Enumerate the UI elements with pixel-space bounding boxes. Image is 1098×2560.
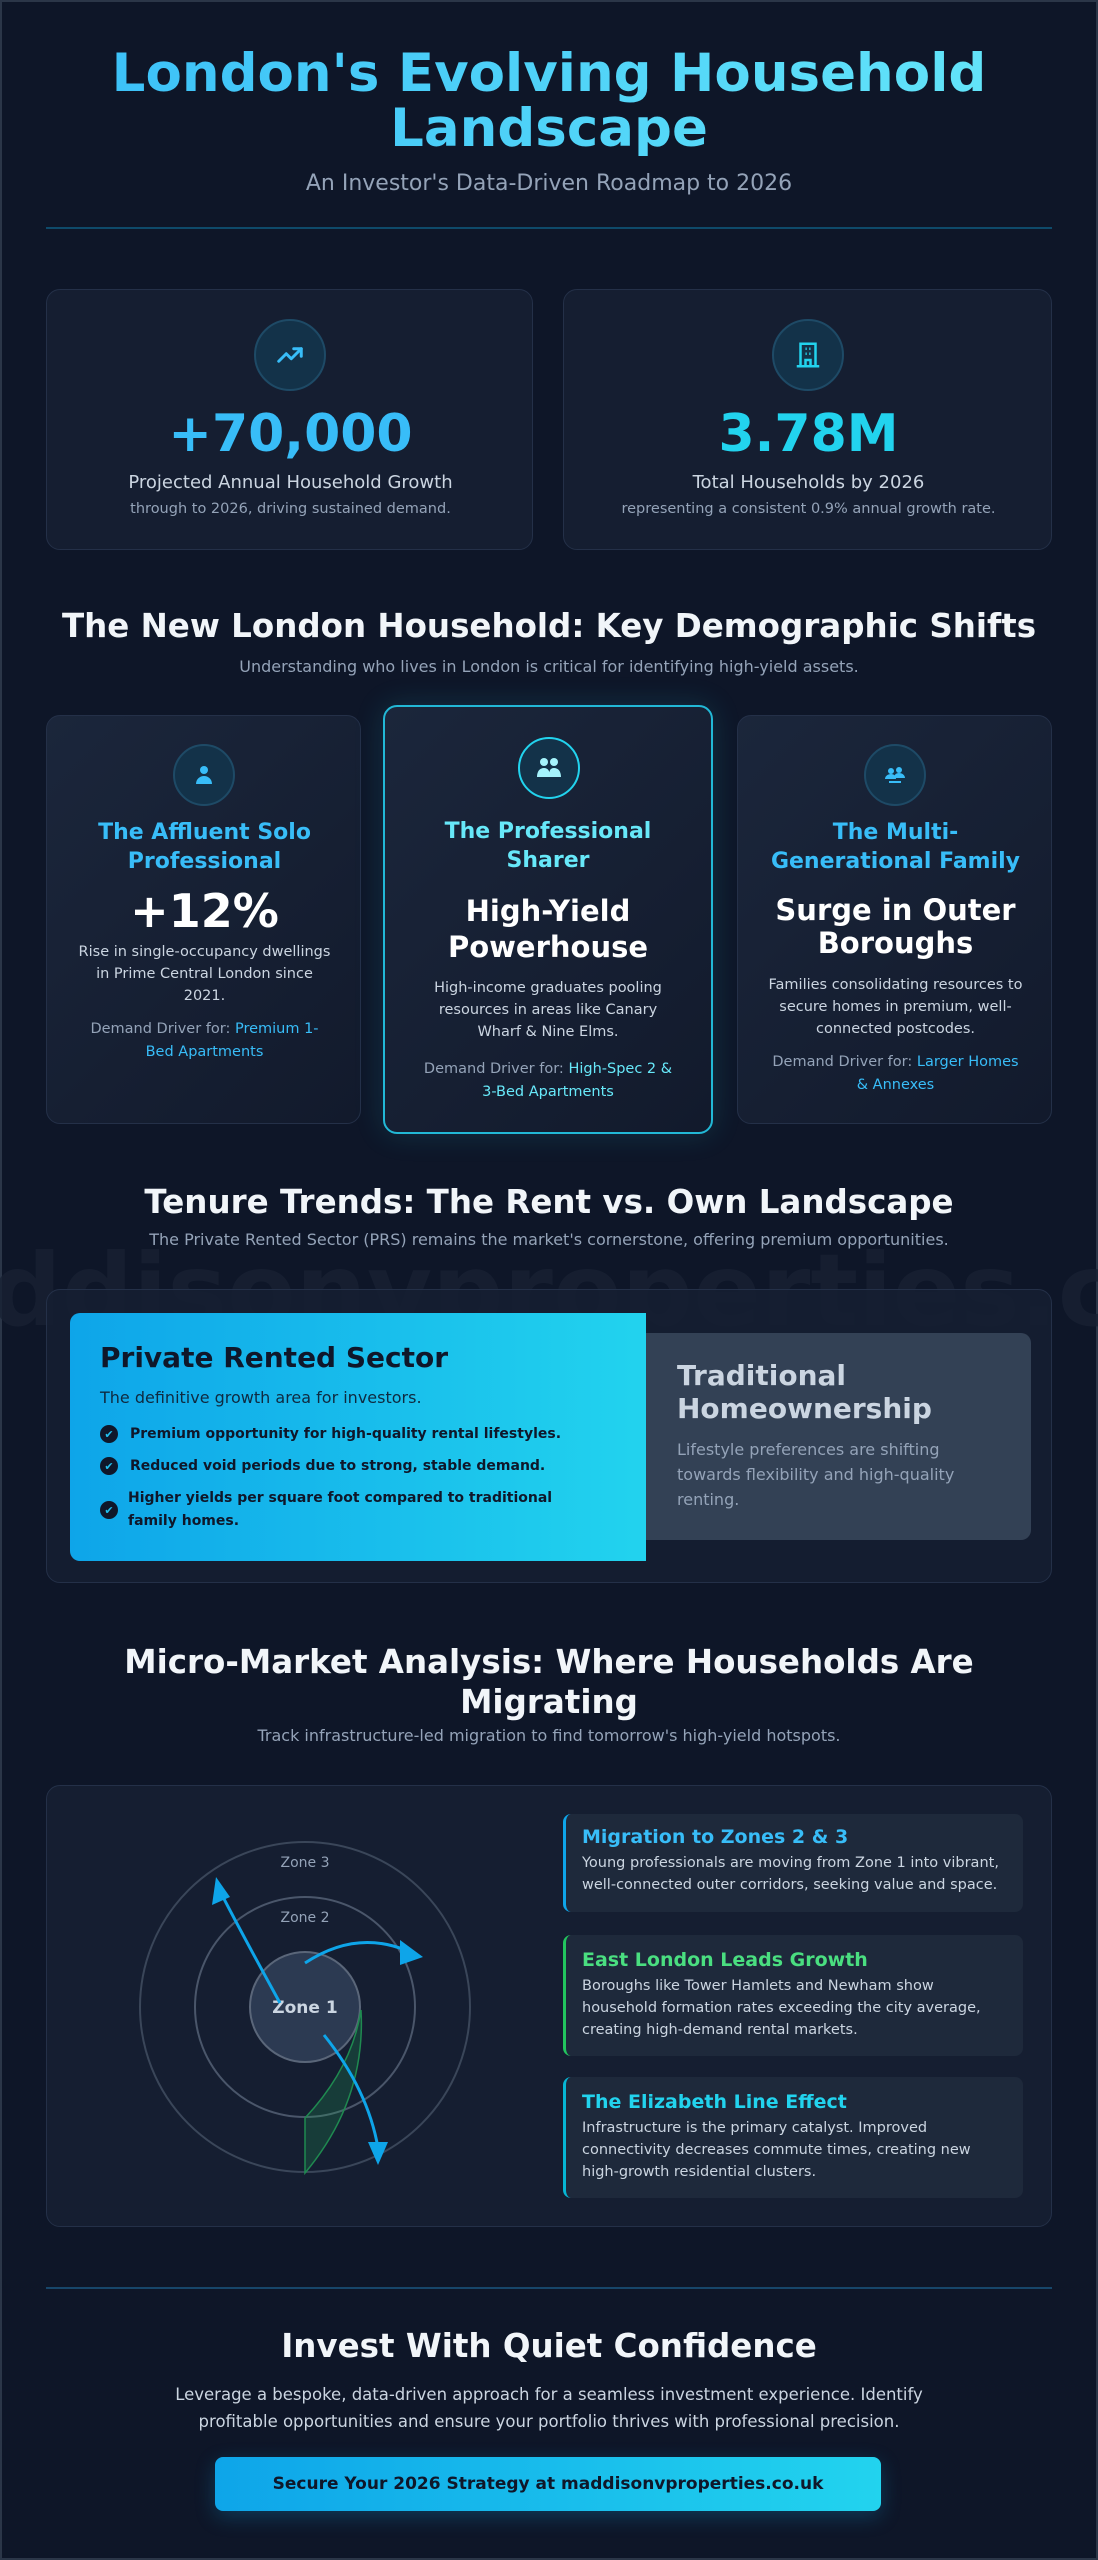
text: The Private Rented Sector (PRS) remains the market's cornerstone, offering premium opportunities. — [149, 1230, 949, 1249]
traditional homeownership: Homeownership — [677, 1392, 932, 1425]
heading: micro-market: Migrating — [460, 1683, 638, 1721]
panel: affluent solo — [46, 715, 361, 1124]
subtitle: An Investor's Data-Driven Roadmap to 2026 — [306, 171, 792, 196]
private rented sector: Private Rented Sector — [100, 1341, 448, 1374]
title: Landscape — [390, 98, 708, 159]
callout: elizabeth line: Infrastructure is the primary catalyst. Improved connectivity decreases commute times, creating new high-growth residential clusters. — [582, 2120, 971, 2180]
panel: professional sharer: High-Yield — [466, 894, 630, 928]
callout: east london — [563, 1935, 1023, 2056]
chart: zone map: Zone 3 — [280, 1855, 330, 1871]
callout: migration: Young professionals are moving from Zone 1 into vibrant, well-connected outer corridors, seeking value and space. — [582, 1855, 999, 1893]
private rented sector: Premium opportunity for high-quality rental lifestyles. — [130, 1426, 561, 1442]
private rented sector: Reduced void periods due to strong, stable demand. — [130, 1458, 545, 1474]
title — [0, 46, 1098, 156]
panel: professional sharer: Powerhouse — [448, 930, 648, 964]
traditional homeownership: Traditional — [677, 1359, 846, 1392]
stat card: household growth: Projected Annual Household Growth — [128, 472, 453, 493]
panel: multi-generational: Surge in Outer — [775, 893, 1016, 927]
panel: affluent solo: Rise in single-occupancy dwellings in Prime Central London since 2021. — [79, 944, 330, 1004]
panel: multi-generational: Generational Family — [771, 849, 1020, 874]
private rented sector: family homes. — [128, 1513, 239, 1529]
heading: micro-market — [124, 1643, 974, 1721]
chart: zone map: Zone 2 — [280, 1910, 330, 1926]
heading: invest: Invest With Quiet Confidence — [281, 2327, 817, 2365]
icon: building — [772, 319, 844, 391]
panel: affluent solo: Demand Driver for: Premium 1-Bed Apartments — [90, 1021, 319, 1060]
stat card: total households: representing a consistent 0.9% annual growth rate. — [621, 501, 996, 517]
heading: demographic shifts: The New London Household: Key Demographic Shifts — [62, 607, 1036, 645]
traditional homeownership — [627, 1333, 1031, 1540]
panel: professional sharer: The Professional — [445, 819, 651, 844]
stat card: household growth — [46, 289, 533, 550]
panel: affluent solo: The Affluent Solo — [98, 820, 311, 845]
button: CTA: Secure Your 2026 Strategy at maddisonvproperties.co.uk — [273, 2474, 823, 2494]
private rented sector: ✔ — [104, 1504, 114, 1516]
callout: migration: Migration to Zones 2 & 3 — [582, 1826, 848, 1848]
callout: east london: Boroughs like Tower Hamlets and Newham show household formation rates exceeding the city average, creating high-demand rental markets. — [582, 1978, 981, 2038]
number: 3.78M — [718, 404, 899, 464]
stat card: total households: Total Households by 2026 — [693, 472, 924, 493]
panel: affluent solo: +12% — [130, 884, 279, 938]
private rented sector — [70, 1313, 646, 1561]
stat card: household growth: through to 2026, driving sustained demand. — [130, 501, 451, 517]
private rented sector: ✔ — [104, 1460, 114, 1472]
panel: professional sharer: Sharer — [506, 848, 589, 873]
callout: migration — [563, 1814, 1023, 1912]
text: Track infrastructure-led migration to find tomorrow's high-yield hotspots. — [257, 1726, 841, 1745]
callout: elizabeth line — [563, 2077, 1023, 2198]
traditional homeownership: Lifestyle preferences are shifting towards flexibility and high-quality renting. — [677, 1440, 954, 1509]
button: CTA — [215, 2457, 881, 2511]
text: Understanding who lives in London is critical for identifying high-yield assets. — [239, 657, 859, 676]
title: London's Evolving Household — [112, 43, 986, 104]
panel: multi-generational: Boroughs — [818, 926, 973, 960]
panel: affluent solo: Professional — [128, 849, 281, 874]
callout: elizabeth line: The Elizabeth Line Effect — [582, 2091, 847, 2113]
stat card: total households — [563, 289, 1052, 550]
panel: multi-generational: Families consolidating resources to secure homes in premium, well-connected postcodes. — [769, 977, 1022, 1037]
icon: trend — [254, 319, 326, 391]
panel: multi-generational: The Multi- — [833, 820, 958, 845]
panel: professional sharer — [383, 705, 713, 1134]
panel: micro-market — [46, 1785, 1052, 2227]
panel: multi-generational — [737, 715, 1052, 1124]
panel: multi-generational: Demand Driver for: Larger Homes & Annexes — [772, 1054, 1019, 1093]
heading: tenure: Tenure Trends: The Rent vs. Own Landscape — [144, 1183, 954, 1221]
private rented sector: The definitive growth area for investors. — [100, 1388, 422, 1407]
chart: zone map: Zone 1 — [272, 1998, 338, 2018]
heading: micro-market: Micro-Market Analysis: Where Households Are — [124, 1643, 974, 1681]
text: invest body: Leverage a bespoke, data-driven approach for a seamless investment experience. Identify profitable opportunities and ensure your portfolio thrives with professional precision. — [175, 2385, 923, 2431]
private rented sector: ✔ — [104, 1428, 114, 1440]
panel: tenure — [46, 1289, 1052, 1583]
panel: professional sharer: High-income graduates pooling resources in areas like Canary Wharf & Nine Elms. — [434, 980, 662, 1040]
number: +70,000 — [168, 404, 413, 464]
private rented sector: Higher yields per square foot compared to traditional — [128, 1490, 552, 1506]
callout: east london: East London Leads Growth — [582, 1949, 868, 1971]
panel: professional sharer: Demand Driver for: High-Spec 2 & 3-Bed Apartments — [424, 1061, 672, 1100]
